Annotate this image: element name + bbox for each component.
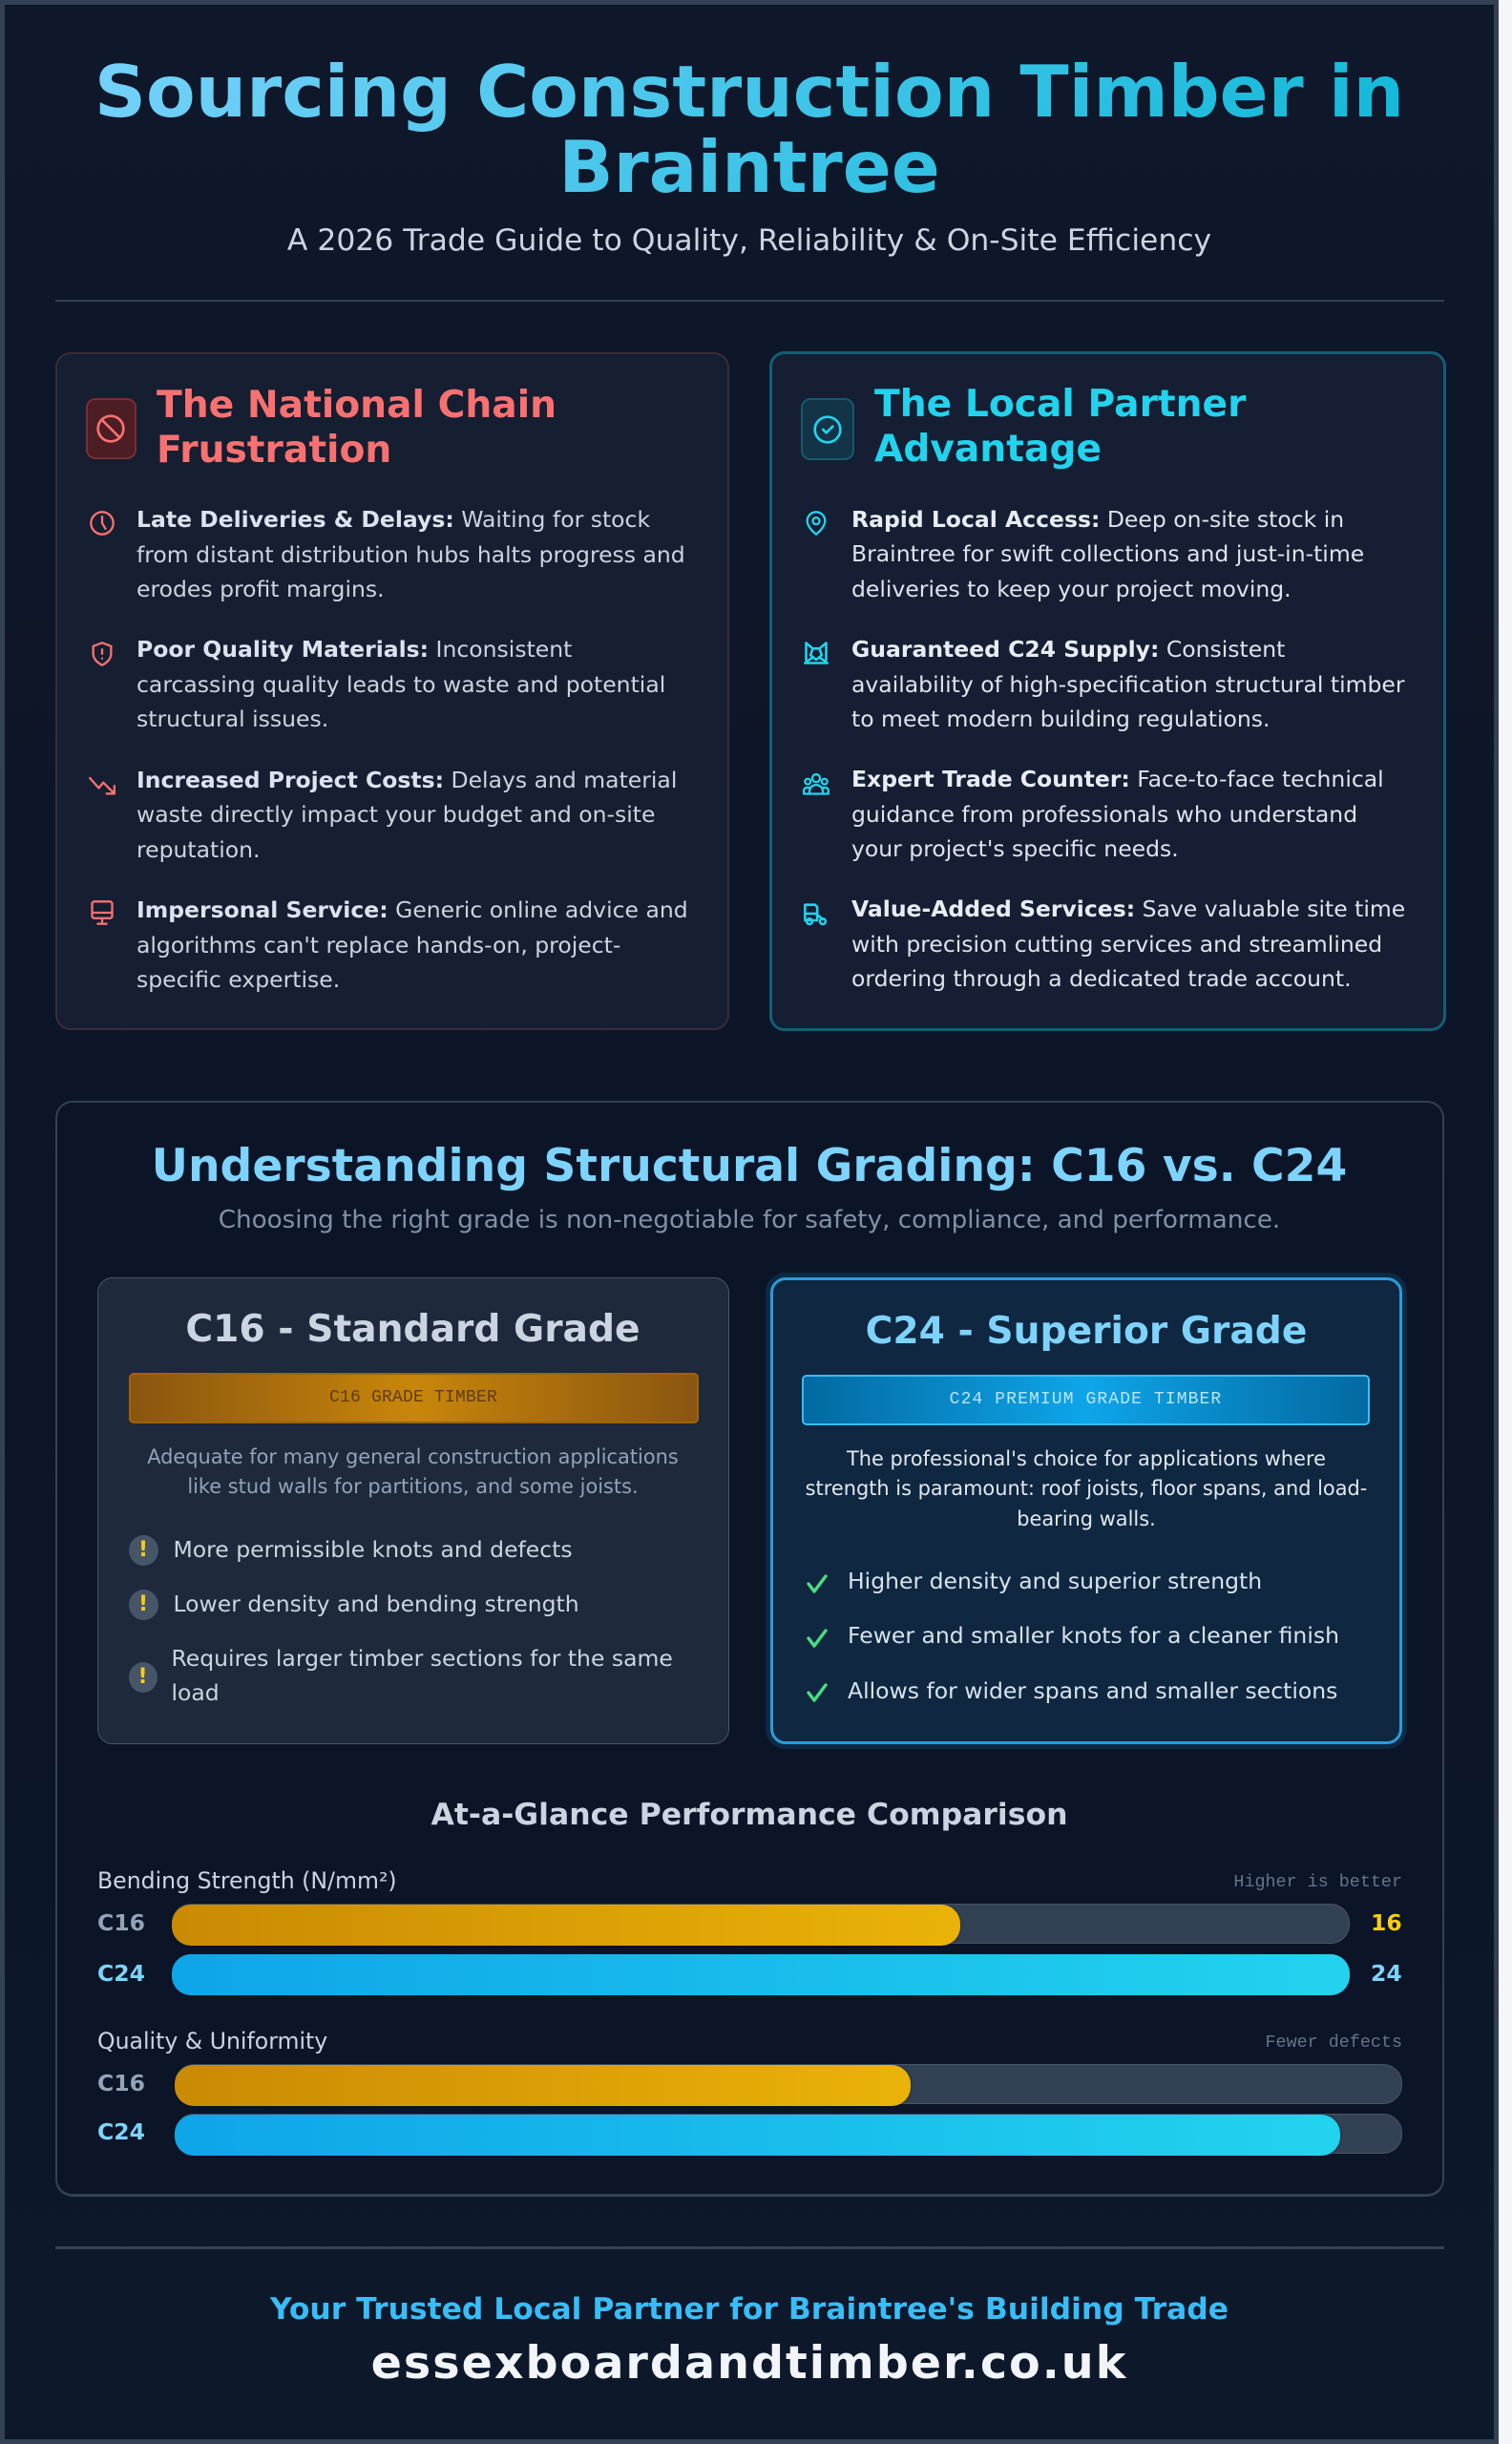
c24 description: bearing walls. bbox=[1017, 1506, 1156, 1529]
item: expert trade counter: Expert Trade Counter: Face-to-face technical bbox=[851, 766, 1384, 792]
text: sections: load bbox=[172, 1678, 220, 1705]
item: guaranteed c24 supply: to meet modern building regulations. bbox=[851, 706, 1270, 732]
icon: map pin bbox=[806, 511, 827, 536]
c16 description: like stud walls for partitions, and some joists. bbox=[187, 1475, 639, 1498]
text: knots: Fewer and smaller knots for a cleaner finish bbox=[848, 1622, 1339, 1649]
bullet: knots: ! bbox=[138, 1537, 148, 1562]
icon: truck bbox=[804, 903, 827, 926]
text: sections bbox=[172, 1644, 673, 1705]
item: guaranteed c24 supply: Guaranteed C24 Supply: Consistent bbox=[851, 636, 1285, 663]
item: poor quality bbox=[136, 636, 665, 732]
title: Braintree bbox=[558, 124, 940, 208]
item: late deliveries bbox=[136, 506, 685, 602]
heading: Advantage bbox=[874, 428, 1102, 471]
item: expert trade counter: your project's specific needs. bbox=[851, 835, 1179, 862]
c24 timber sample bbox=[802, 1375, 1370, 1425]
c24 timber sample: C24 PREMIUM GRADE TIMBER bbox=[950, 1390, 1222, 1409]
item: rapid local access: Rapid Local Access: Deep on-site stock in bbox=[851, 506, 1344, 533]
item: impersonal service: Impersonal Service: Generic online advice and bbox=[136, 896, 688, 923]
c16 title: C16 - Standard Grade bbox=[185, 1308, 640, 1350]
item: late deliveries: erodes profit margins. bbox=[136, 576, 385, 602]
item: expert trade counter: guidance from professionals who understand bbox=[851, 801, 1357, 828]
item: value-added services bbox=[851, 895, 1405, 992]
c24 description bbox=[806, 1447, 1367, 1529]
item: poor quality: carcassing quality leads to waste and potential bbox=[136, 671, 665, 698]
bar: c16 bending bbox=[172, 1905, 960, 1946]
item: guaranteed c24 supply: availability of high-specification structural timber bbox=[851, 671, 1405, 698]
icon: trending down bbox=[89, 777, 116, 795]
item: expert trade counter bbox=[851, 766, 1384, 862]
item: rapid local access: deliveries to keep your project moving. bbox=[851, 576, 1292, 602]
bullet: density: ! bbox=[138, 1592, 148, 1616]
c16 timber sample bbox=[128, 1373, 699, 1422]
heading: grading: Understanding Structural Grading: C16 vs. C24 bbox=[152, 1140, 1347, 1192]
value: 24: 24 bbox=[1371, 1959, 1402, 1986]
c16 timber sample: C16 GRADE TIMBER bbox=[329, 1388, 497, 1407]
panel: the national chain frustration bbox=[55, 352, 729, 1030]
item: impersonal service bbox=[136, 896, 688, 993]
item: rapid local access bbox=[851, 506, 1364, 602]
bullet: sections: ! bbox=[137, 1665, 148, 1689]
chart note: Fewer defects bbox=[1266, 2032, 1402, 2053]
item: impersonal service: algorithms can't replace hands-on, project- bbox=[136, 932, 620, 959]
bullet: sections bbox=[128, 1662, 157, 1693]
item: guaranteed c24 supply bbox=[851, 636, 1405, 732]
footer url: essexboardandtimber.co.uk bbox=[371, 2337, 1127, 2389]
footer tagline: Your Trusted Local Partner for Braintree's Building Trade bbox=[270, 2291, 1228, 2326]
item: increased costs: Increased Project Costs: Delays and material bbox=[136, 766, 677, 792]
heading: The National Chain bbox=[157, 384, 556, 427]
bullet: knots bbox=[128, 1535, 158, 1566]
text: sections: Requires larger timber sections for the same bbox=[172, 1644, 673, 1671]
icon: supply bbox=[804, 642, 829, 664]
bar: c16 quality bbox=[175, 2065, 911, 2106]
icon: check 2 bbox=[807, 1629, 828, 1648]
chart: bending strength bbox=[97, 1867, 1402, 1995]
bar: c24 quality bbox=[175, 2115, 1340, 2156]
card: c16 standard grade bbox=[97, 1277, 729, 1744]
item: increased costs bbox=[136, 766, 677, 863]
bar: c24 bending bbox=[172, 1954, 1350, 1995]
icon: users bbox=[803, 773, 830, 795]
item: late deliveries: Late Deliveries & Delays: Waiting for stock bbox=[136, 506, 650, 533]
title bbox=[0, 53, 1499, 204]
heading bbox=[157, 384, 556, 472]
chart: quality and uniformity bbox=[97, 2028, 1402, 2156]
item: value-added services: ordering through a dedicated trade account. bbox=[851, 965, 1352, 992]
heading: performance comparison: At-a-Glance Performance Comparison bbox=[430, 1798, 1068, 1832]
icon: monitor bbox=[91, 900, 114, 925]
icon: check circle bbox=[800, 398, 853, 460]
item: poor quality: Poor Quality Materials: Inconsistent bbox=[136, 636, 572, 663]
icon: shield alert bbox=[92, 642, 113, 666]
heading: Frustration bbox=[157, 429, 391, 472]
item: late deliveries: from distant distribution hubs halts progress and bbox=[136, 541, 685, 568]
item: increased costs: waste directly impact your budget and on-site bbox=[136, 801, 655, 828]
heading: The Local Partner bbox=[874, 383, 1246, 426]
bullet: density bbox=[128, 1590, 158, 1620]
c16 description bbox=[147, 1445, 679, 1498]
subtitle: A 2026 Trade Guide to Quality, Reliability & On-Site Efficiency bbox=[287, 223, 1211, 258]
c24 title: C24 - Superior Grade bbox=[866, 1310, 1307, 1352]
row: c16 label: C16 bbox=[97, 1909, 145, 1936]
heading bbox=[874, 383, 1247, 471]
row: c24 label: C24 bbox=[97, 2117, 145, 2144]
item: value-added services: Value-Added Services: Save valuable site time bbox=[851, 895, 1405, 922]
title: Sourcing Construction Timber in bbox=[94, 50, 1404, 134]
icon: ban bbox=[86, 398, 136, 459]
chart note: Higher is better bbox=[1233, 1872, 1402, 1892]
text: spans: Allows for wider spans and smaller sections bbox=[848, 1676, 1337, 1703]
icon: clock bbox=[90, 511, 115, 536]
panel: the local partner advantage bbox=[769, 351, 1446, 1031]
value: 16: 16 bbox=[1371, 1909, 1402, 1936]
chart label: Bending Strength (N/mm²) bbox=[97, 1867, 397, 1894]
item: poor quality: structural issues. bbox=[136, 706, 328, 732]
item: increased costs: reputation. bbox=[136, 836, 261, 863]
row: c16 label: C16 bbox=[97, 2070, 145, 2096]
text: knots: More permissible knots and defects bbox=[174, 1535, 573, 1562]
panel: structural grading section bbox=[55, 1101, 1444, 2197]
c16 description: Adequate for many general construction applications bbox=[147, 1445, 679, 1468]
icon: check 1 bbox=[807, 1574, 828, 1593]
card: c24 superior grade bbox=[770, 1277, 1402, 1744]
item: impersonal service: specific expertise. bbox=[136, 966, 340, 993]
c24 description: The professional's choice for applications where bbox=[847, 1447, 1326, 1470]
subheading: grading: Choosing the right grade is non-negotiable for safety, compliance, and performance. bbox=[219, 1206, 1280, 1234]
c24 description: strength is paramount: roof joists, floor spans, and load- bbox=[806, 1477, 1367, 1500]
text: density: Lower density and bending strength bbox=[174, 1591, 579, 1617]
text: density: Higher density and superior strength bbox=[848, 1568, 1262, 1594]
chart label: Quality & Uniformity bbox=[97, 2028, 327, 2054]
item: rapid local access: Braintree for swift collections and just-in-time bbox=[851, 540, 1364, 567]
icon: check 3 bbox=[807, 1683, 828, 1702]
row: c24 label: C24 bbox=[97, 1959, 145, 1986]
item: value-added services: with precision cutting services and streamlined bbox=[851, 931, 1382, 958]
